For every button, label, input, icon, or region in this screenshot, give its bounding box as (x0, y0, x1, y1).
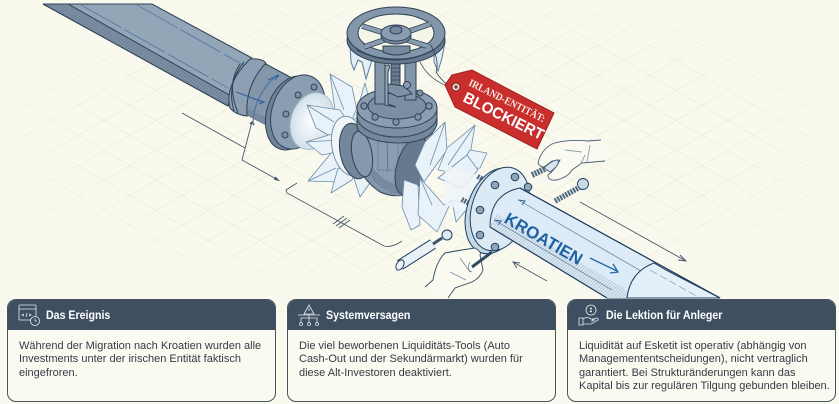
heading: Systemversagen (326, 308, 410, 322)
left dimension lines (182, 113, 402, 246)
body text (579, 340, 830, 392)
red tag: Irland-Entität blockiert (445, 70, 554, 149)
tag string (420, 44, 450, 85)
wrench (394, 230, 452, 272)
body text: Cash-Out und der Sekundärmarkt) wurden für (299, 353, 523, 365)
body text: Investments unter der irischen Entität faktisch (19, 353, 241, 365)
technical illustration: frozen pipeline valve (0, 0, 839, 298)
left flange (256, 68, 341, 157)
valve yoke and stem (375, 62, 416, 107)
body text: Liquidität auf Esketit ist operativ (abhängig von (579, 340, 806, 352)
left pipe (grey) (43, 4, 292, 126)
heading: Das Ereignis (46, 308, 110, 322)
left ice cluster (306, 74, 372, 197)
right pipe (light blue) (490, 188, 720, 298)
panel header (8, 300, 275, 330)
body text: garantiert. Bei Strukturänderungen kann das (579, 367, 795, 379)
body text: Managemententscheidungen), nicht vertraglich (579, 353, 808, 365)
panel: Systemversagen (287, 299, 556, 402)
panel: Die Lektion für Anleger (567, 299, 836, 402)
icon: browser window with clock (18, 304, 40, 326)
gate valve body (327, 88, 437, 199)
pipe label: Kroatien: KROATIEN (501, 209, 586, 269)
body text (299, 340, 523, 379)
hand with wrench (425, 248, 492, 298)
panel header (568, 300, 835, 330)
loose bolts (532, 165, 588, 201)
right dimension arrows (513, 202, 686, 281)
body text: eingefroren. (19, 367, 78, 379)
red tag: Irland-Entität blockiert: BLOCKIERT (460, 89, 547, 144)
icon: hand holding coin (578, 304, 599, 326)
body text: Kapital bis zur regulären Tilgung gebunden bleiben. (579, 380, 830, 392)
body text (19, 340, 261, 379)
handwheel (347, 7, 445, 79)
hand with bolt (538, 140, 605, 180)
panel header (288, 300, 555, 330)
red tag: Irland-Entität blockiert: IRLAND-ENTITÄT: (467, 76, 548, 125)
right ice cluster (402, 122, 487, 232)
body text: diese Alt-Investoren deaktiviert. (299, 367, 452, 379)
body text: Die viel beworbenen Liquiditäts-Tools (Auto (299, 340, 510, 352)
body text: Während der Migration nach Kroatien wurden alle (19, 340, 261, 352)
right flange (455, 159, 540, 261)
panel: Das Ereignis (7, 299, 276, 402)
icon: warning triangle with network (298, 304, 320, 326)
heading: Die Lektion für Anleger (606, 308, 722, 322)
